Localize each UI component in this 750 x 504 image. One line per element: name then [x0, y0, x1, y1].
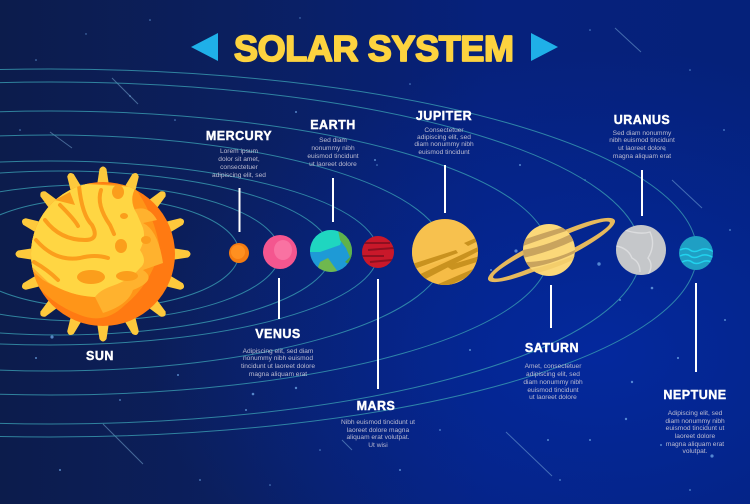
saturn planet — [488, 218, 615, 282]
neptune text: laoreet dolore — [675, 433, 715, 440]
mars text — [341, 399, 415, 449]
mars text: aliquam erat volutpat. — [346, 434, 410, 441]
sun — [16, 166, 190, 342]
saturn text: euismod tincidunt — [527, 387, 579, 394]
orbit lines — [0, 69, 697, 437]
saturn text — [523, 341, 583, 401]
shooting stars — [50, 28, 702, 476]
heading: SOLAR SYSTEM — [234, 28, 514, 69]
mars text: Nibh euismod tincidunt ut — [341, 419, 415, 426]
uranus text — [609, 113, 675, 160]
venus text: VENUS — [255, 327, 301, 341]
jupiter planet — [412, 219, 482, 288]
mercury planet — [229, 243, 249, 263]
mercury text: dolor sit amet, — [218, 156, 260, 163]
uranus text: Sed diam nonummy — [613, 130, 672, 137]
jupiter text: diam nonummy nibh — [414, 141, 474, 148]
venus text: magna aliquam erat — [249, 371, 307, 378]
venus text: nonummy nibh euismod — [243, 355, 313, 362]
jupiter text — [414, 109, 474, 156]
mercury text: Lorem ipsum — [220, 148, 259, 155]
saturn text: adipiscing elit, sed — [526, 371, 580, 378]
jupiter text: euismod tincidunt — [418, 149, 470, 156]
earth text: ut laoreet dolore — [309, 161, 357, 168]
mercury text: MERCURY — [206, 129, 272, 143]
uranus text: ut laoreet dolore — [618, 145, 666, 152]
saturn pointer — [550, 285, 552, 328]
sun rays — [16, 166, 190, 342]
title — [191, 28, 514, 69]
earth planet — [310, 230, 352, 272]
saturn text: Amet, consectetuer — [525, 363, 582, 370]
saturn text: ut laoreet dolore — [529, 394, 577, 401]
mercury text: adipiscing elit, sed — [212, 172, 266, 179]
venus text — [241, 327, 315, 378]
right arrow — [531, 33, 558, 61]
mercury pointer — [238, 188, 240, 232]
uranus text: URANUS — [614, 113, 670, 127]
saturn text: diam nonummy nibh — [523, 379, 583, 386]
jupiter text: adipiscing elit, sed — [417, 134, 471, 141]
jupiter text: JUPITER — [416, 109, 472, 123]
neptune text: Adipiscing elit, sed — [668, 410, 723, 417]
uranus text: nibh euismod tincidunt — [609, 137, 675, 144]
earth text — [307, 118, 359, 168]
mercury text — [206, 129, 272, 179]
neptune text: NEPTUNE — [663, 388, 727, 402]
neptune text: magna aliquam erat — [666, 441, 724, 448]
jupiter text: Consectetuer — [424, 127, 464, 134]
neptune text: volutpat. — [683, 448, 708, 455]
neptune text: euismod tincidunt ut — [666, 425, 724, 432]
uranus planet — [616, 225, 666, 275]
mars planet — [362, 236, 394, 268]
venus pointer — [278, 278, 280, 319]
neptune text — [663, 388, 727, 455]
venus planet — [263, 235, 297, 269]
neptune text: diam nonummy nibh — [665, 418, 725, 425]
sun label: SUN — [86, 349, 114, 363]
saturn text: SATURN — [525, 341, 579, 355]
mars text: laoreet dolore magna — [347, 427, 409, 434]
ring — [483, 208, 620, 292]
earth text: nonummy nibh — [311, 145, 355, 152]
earth text: Sed diam — [319, 137, 347, 144]
earth text: EARTH — [310, 118, 356, 132]
venus text: tincidunt ut laoreet dolore — [241, 363, 315, 370]
mars text: MARS — [357, 399, 395, 413]
uranus text: magna aliquam erat — [613, 153, 671, 160]
earth pointer — [332, 178, 334, 222]
mars text: Ut wisi — [368, 442, 388, 449]
uranus pointer — [641, 170, 643, 216]
earth text: euismod tincidunt — [307, 153, 359, 160]
venus text: Adipiscing elit, sed diam — [243, 348, 314, 355]
left arrow — [191, 33, 218, 61]
neptune planet — [679, 236, 714, 270]
neptune pointer — [695, 283, 697, 372]
mars pointer — [377, 279, 379, 389]
mercury text: consectetuer — [220, 164, 259, 171]
jupiter pointer — [444, 165, 446, 213]
